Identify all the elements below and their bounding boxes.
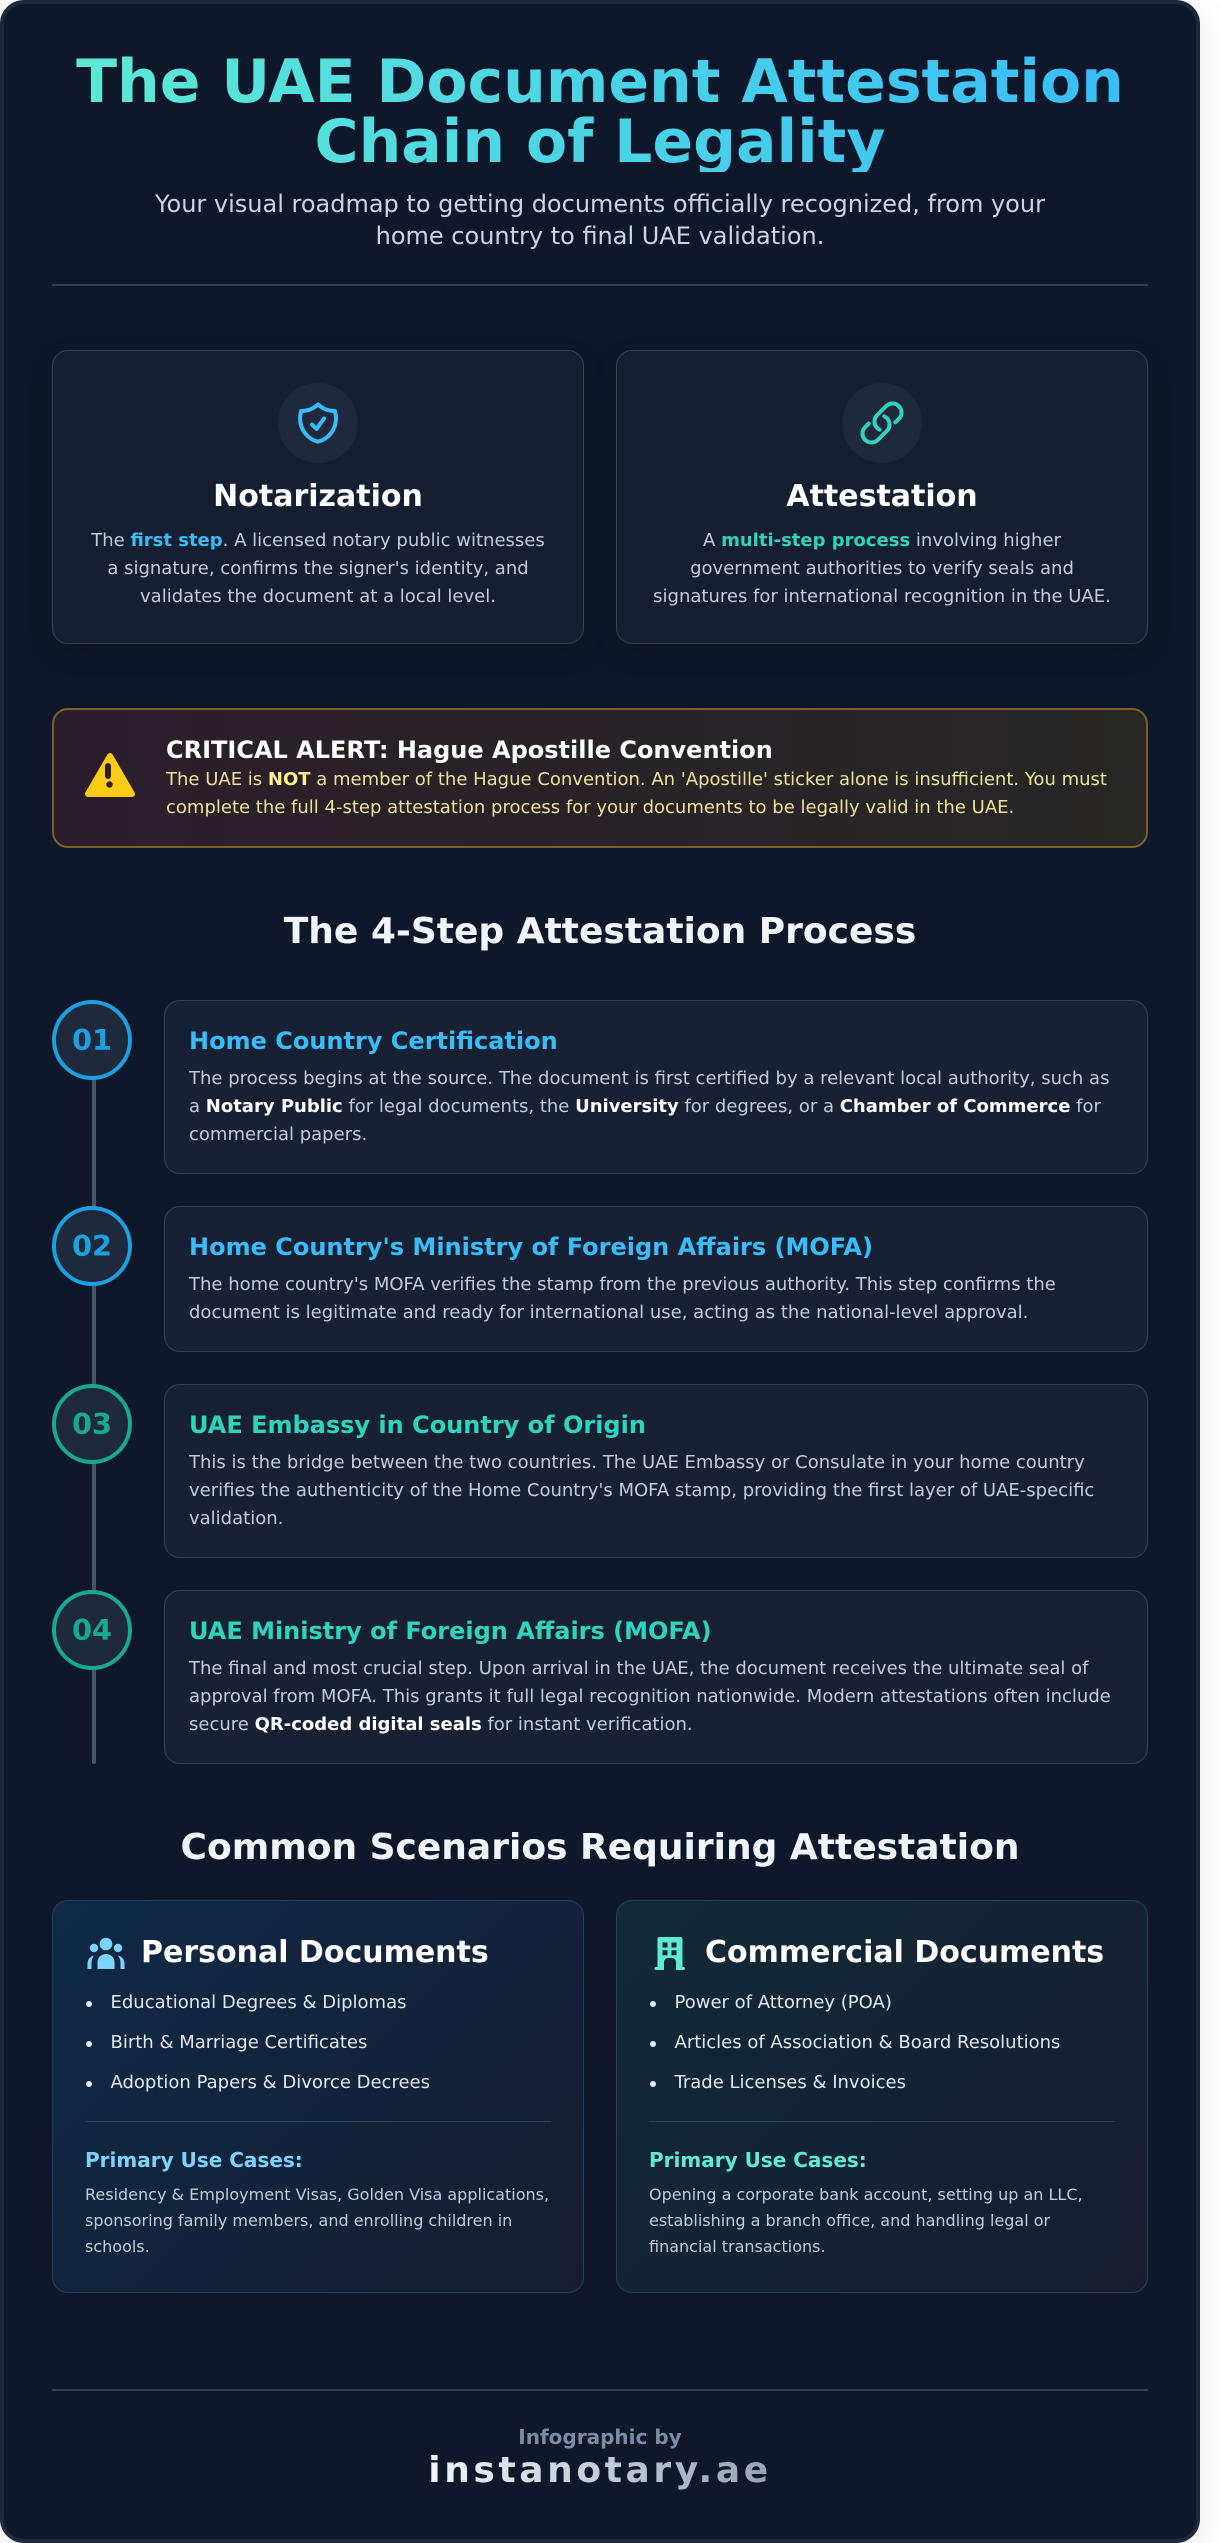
step 1 text: The process begins at the source. The document is first certified by a relevant local authority, such as [189, 1068, 1109, 1089]
use cases text: financial transactions. [649, 2237, 826, 2256]
step number 03: 03 [72, 1407, 112, 1441]
use cases text: Residency & Employment Visas, Golden Visa applications, [85, 2185, 549, 2204]
step 2 heading: Home Country's Ministry of Foreign Affairs (MOFA) [189, 1233, 873, 1261]
step number 01: 01 [72, 1023, 112, 1057]
commercial use cases [649, 2121, 1115, 2260]
step 4 text: secure QR-coded digital seals for instant verification. [189, 1714, 693, 1735]
icon: chain link [842, 383, 922, 463]
personal document list: Educational Degrees & Diplomas [110, 1992, 406, 2013]
commercial heading row [654, 1935, 1104, 1970]
use cases heading: Primary Use Cases: [649, 2148, 867, 2172]
definitions row [52, 350, 1148, 644]
title [52, 52, 1148, 172]
step 4 heading: UAE Ministry of Foreign Affairs (MOFA) [189, 1617, 712, 1645]
step 4 text [188, 1658, 1111, 1735]
timeline connector line [92, 1000, 96, 1764]
panel: commercial documents [616, 1900, 1148, 2293]
step card 1 [164, 1000, 1148, 1174]
text: notarization description: The first step. A licensed notary public witnesses [91, 530, 545, 551]
heading: 4-step process: The 4-Step Attestation Process [284, 911, 916, 952]
personal heading: Personal Documents [141, 1935, 489, 1970]
step 1 heading: Home Country Certification [189, 1027, 558, 1055]
commercial heading: Commercial Documents [705, 1935, 1104, 1970]
title: The UAE Document Attestation [76, 47, 1124, 117]
personal document list [86, 1992, 430, 2093]
step 2 text: document is legitimate and ready for international use, acting as the national-level approval. [189, 1302, 1028, 1323]
icon: people [88, 1938, 124, 1969]
icon: office building [654, 1937, 685, 1970]
step number 02: 02 [72, 1229, 112, 1263]
timeline: four steps [52, 1000, 1148, 1764]
step number 02 [52, 1206, 132, 1286]
step number 04 [52, 1590, 132, 1670]
text: attestation description: government authorities to verify seals and [690, 558, 1074, 579]
commercial document list: Trade Licenses & Invoices [674, 2072, 906, 2093]
use cases text [85, 2185, 549, 2256]
step 4 text: approval from MOFA. This grants it full legal recognition nationwide. Modern attestations often include [189, 1686, 1111, 1707]
heading: notarization: Notarization [213, 479, 423, 514]
step 3 text: This is the bridge between the two countries. The UAE Embassy or Consulate in your home country [189, 1452, 1085, 1473]
heading: common scenarios: Common Scenarios Requiring Attestation [181, 1827, 1019, 1868]
step 2 text [188, 1274, 1056, 1323]
step card 2 [164, 1206, 1148, 1352]
text: attestation description: A multi-step process involving higher [703, 530, 1061, 551]
step 1 [52, 1000, 1148, 1174]
step number 04: 04 [72, 1613, 112, 1647]
panel: attestation [616, 350, 1148, 644]
alert heading: CRITICAL ALERT: Hague Apostille Convention [166, 736, 773, 764]
use cases text: establishing a branch office, and handling legal or [649, 2211, 1050, 2230]
use cases text: Opening a corporate bank account, setting up an LLC, [649, 2185, 1083, 2204]
text: notarization description [91, 530, 545, 607]
text: notarization description: a signature, confirms the signer's identity, and [107, 558, 529, 579]
step 1 text: a Notary Public for legal documents, the University for degrees, or a Chamber of Commerce for [189, 1096, 1101, 1117]
step 3 heading: UAE Embassy in Country of Origin [189, 1411, 646, 1439]
alert text: complete the full 4-step attestation process for your documents to be legally valid in the UAE. [166, 797, 1014, 818]
panel: personal documents [52, 1900, 584, 2293]
callout: critical alert [52, 708, 1148, 848]
use cases heading: Primary Use Cases: [85, 2148, 303, 2172]
step 2 [52, 1206, 1148, 1352]
text: attestation description: signatures for international recognition in the UAE. [653, 586, 1111, 607]
step 3 text: verifies the authenticity of the Home Country's MOFA stamp, providing the first layer of UAE-specific [189, 1480, 1094, 1501]
commercial document list [650, 1992, 1060, 2093]
brand name: instanotary.ae [428, 2450, 772, 2491]
step 3 text [188, 1452, 1094, 1529]
text: notarization description: validates the document at a local level. [140, 586, 496, 607]
personal document list: Birth & Marriage Certificates [110, 2032, 367, 2053]
step card 4 [164, 1590, 1148, 1764]
subtitle: home country to final UAE validation. [376, 222, 824, 250]
step 3 [52, 1384, 1148, 1558]
step number 01 [52, 1000, 132, 1080]
personal document list: Adoption Papers & Divorce Decrees [110, 2072, 430, 2093]
step number 03 [52, 1384, 132, 1464]
subtitle: Your visual roadmap to getting documents officially recognized, from your [155, 190, 1045, 218]
step 3 text: validation. [189, 1508, 283, 1529]
step 4 [52, 1590, 1148, 1764]
alert text [166, 769, 1107, 818]
step card 3 [164, 1384, 1148, 1558]
use cases text: schools. [85, 2237, 150, 2256]
heading: attestation: Attestation [786, 479, 978, 514]
use cases text: sponsoring family members, and enrolling children in [85, 2211, 512, 2230]
step 2 text: The home country's MOFA verifies the stamp from the previous authority. This step confirms the [189, 1274, 1056, 1295]
subtitle [155, 190, 1045, 250]
icon: warning triangle [85, 753, 135, 797]
personal heading row [88, 1935, 489, 1970]
alert text: The UAE is NOT a member of the Hague Convention. An 'Apostille' sticker alone is insufficient. You must [166, 769, 1107, 790]
scenarios row [52, 1900, 1148, 2293]
header [52, 52, 1148, 286]
commercial document list: Articles of Association & Board Resolutions [674, 2032, 1060, 2053]
step 1 text: commercial papers. [189, 1124, 367, 1145]
commercial document list: Power of Attorney (POA) [674, 1992, 892, 2013]
step 1 text [188, 1068, 1109, 1145]
title: Chain of Legality [315, 107, 885, 177]
panel: notarization [52, 350, 584, 644]
icon: shield check [278, 383, 358, 463]
footer credit: Infographic by [518, 2425, 682, 2449]
step 4 text: The final and most crucial step. Upon arrival in the UAE, the document receives the ultimate seal of [189, 1658, 1088, 1679]
personal use cases [85, 2121, 551, 2260]
footer [52, 2389, 1148, 2491]
text: attestation description [653, 530, 1111, 607]
use cases text [649, 2185, 1083, 2256]
